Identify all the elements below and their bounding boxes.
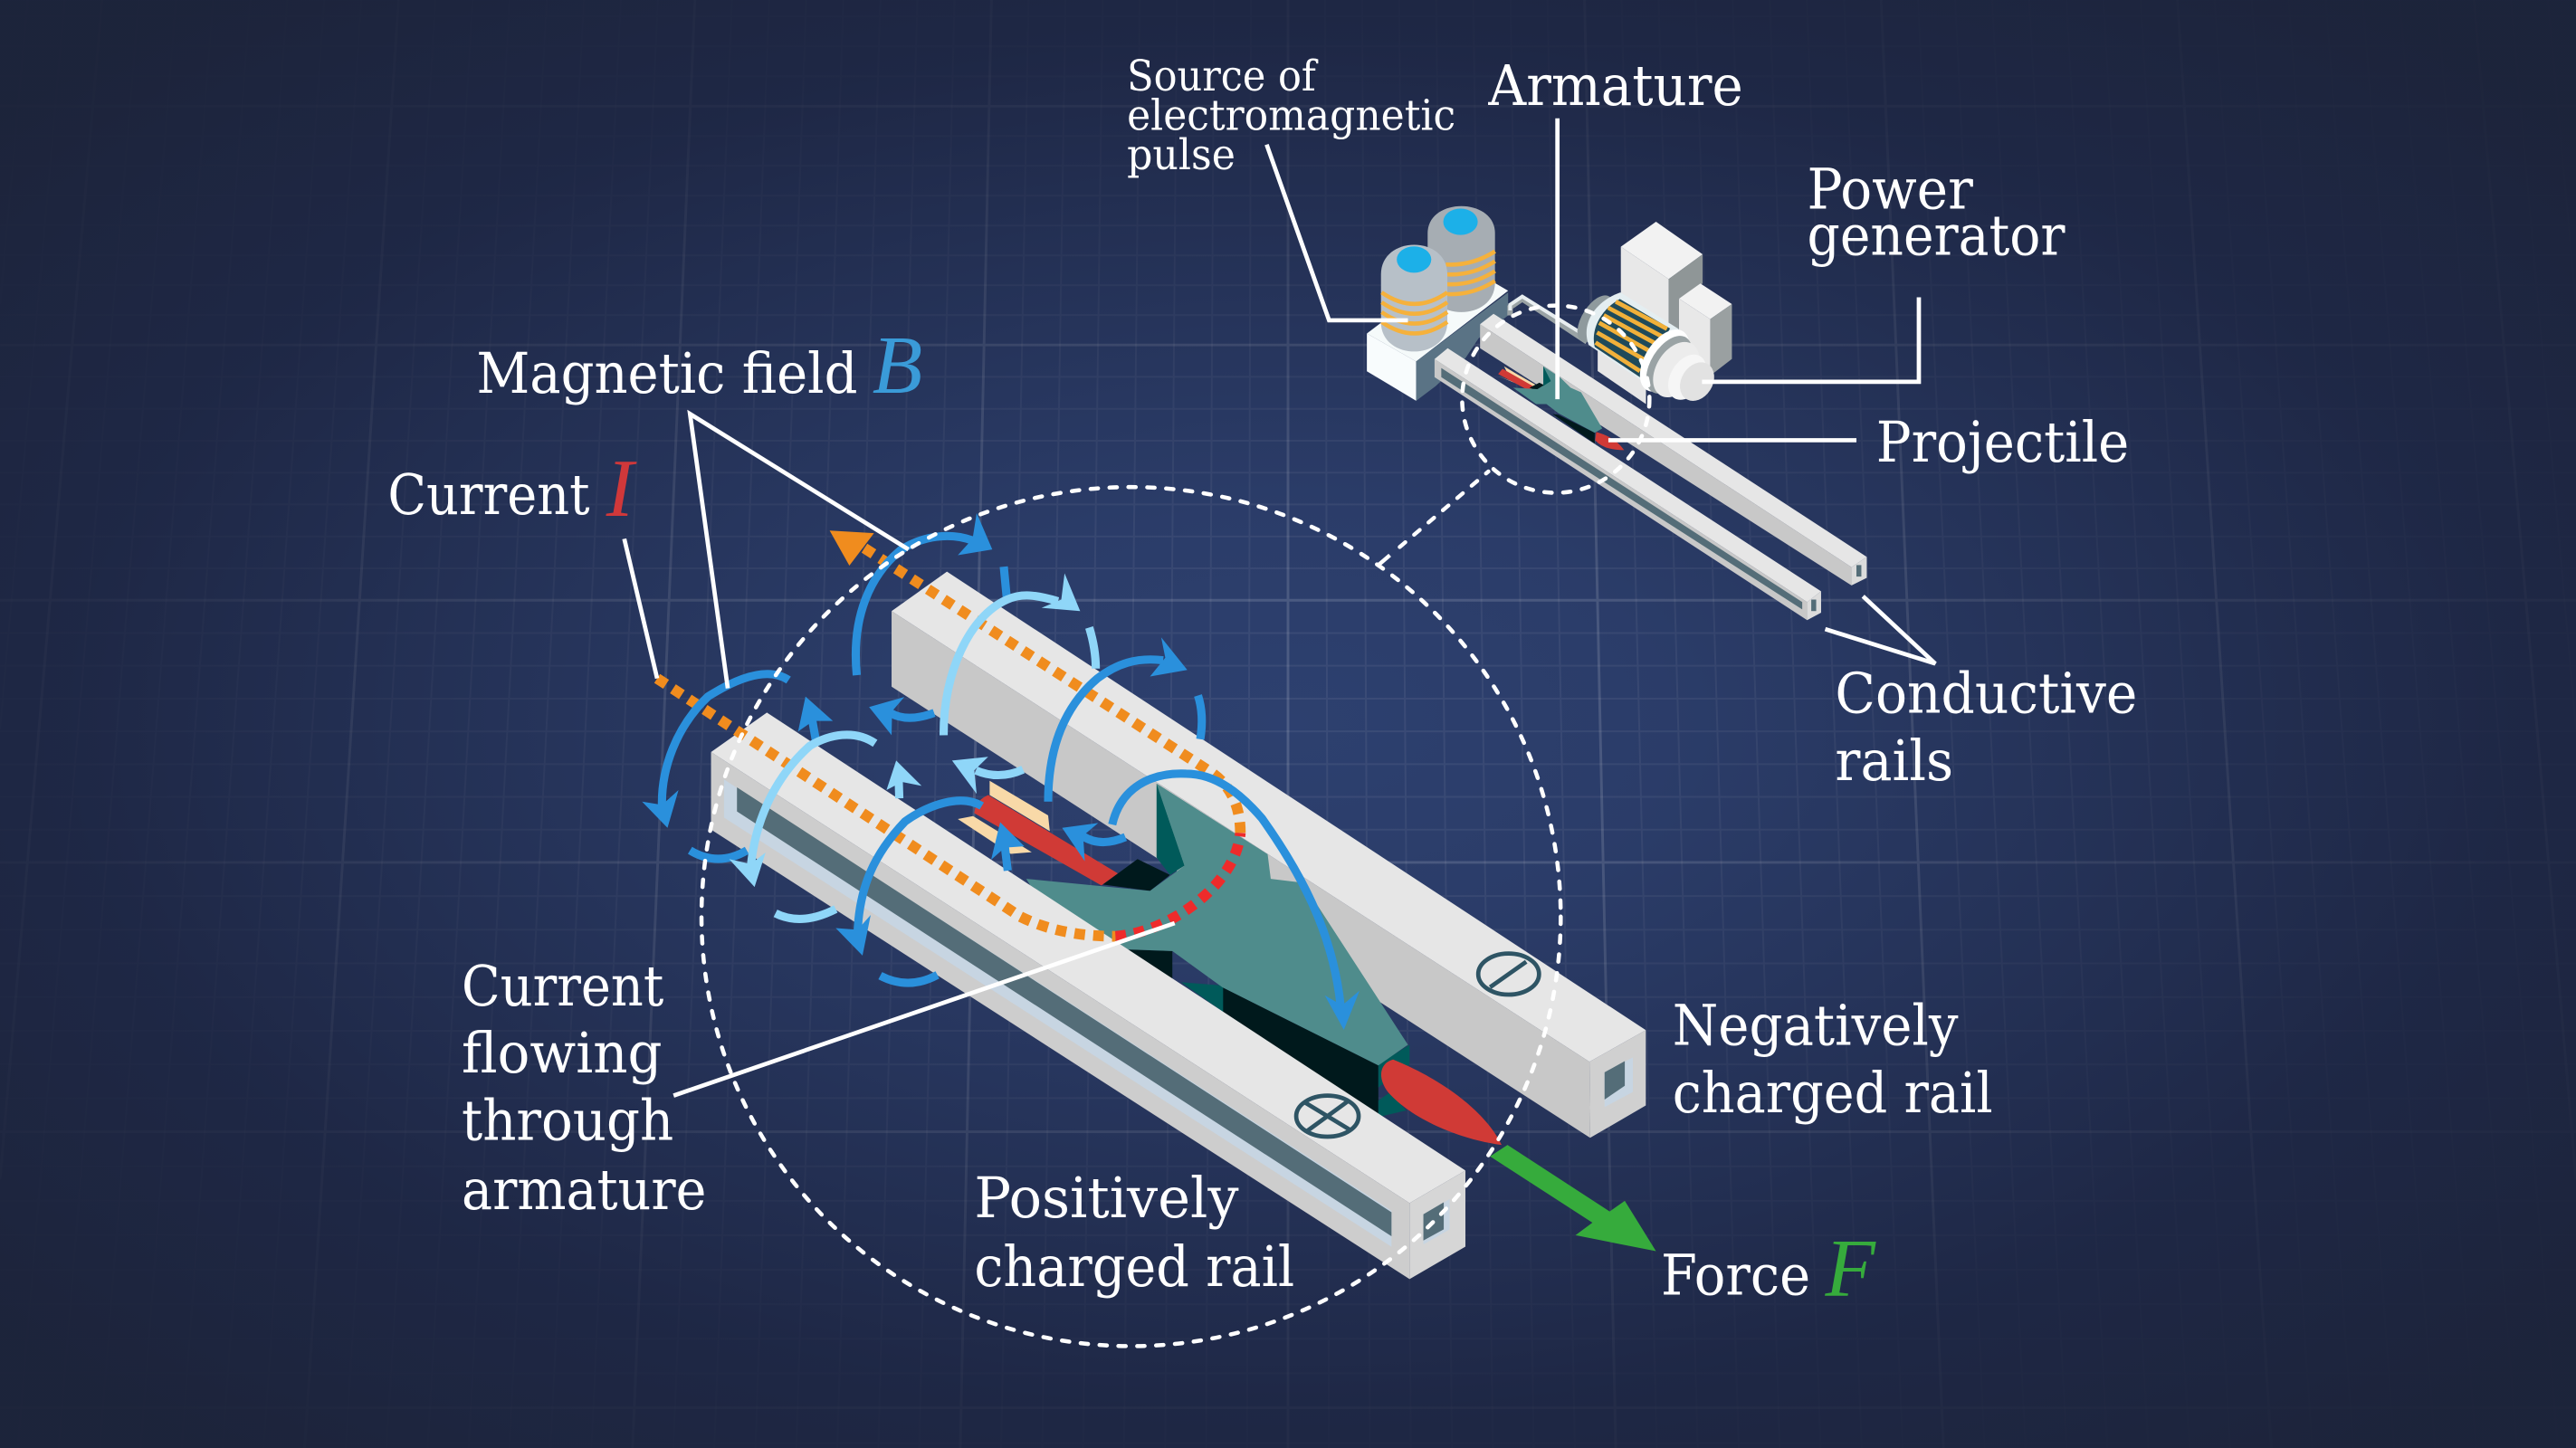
rear rail end window [1605, 1057, 1633, 1107]
front coil cylinder [1381, 244, 1447, 351]
side groove [724, 779, 1391, 1247]
leader lines [625, 119, 1935, 1096]
label: force F [1661, 1223, 1877, 1314]
force arrow [1490, 1145, 1656, 1252]
label: negatively charged rail: charged rail [1673, 1061, 1993, 1126]
main projectile [958, 781, 1502, 1145]
label: conductive rails [1835, 662, 2137, 794]
wire frame [1510, 297, 1587, 342]
overview front rail [1435, 348, 1821, 620]
symbol: current in [1296, 1096, 1359, 1137]
armature dark fin [1157, 784, 1185, 875]
label: force F: Force [1661, 1243, 1810, 1308]
magnetic field arcs: front rail [642, 674, 1025, 983]
projectile shaft [974, 795, 1118, 885]
projectile nose [1381, 1060, 1502, 1145]
label: negatively charged rail: Negatively [1673, 993, 1959, 1058]
label: source of electromagnetic pulse: electromagnetic [1127, 90, 1455, 140]
label: magnetic field B: B [873, 319, 922, 411]
symbol: current out [1478, 954, 1539, 995]
label: power generator [1808, 157, 2066, 268]
overview rear rail [1480, 314, 1866, 586]
label: current flowing through armature: armature [462, 1157, 706, 1223]
label: source of electromagnetic pulse [1127, 52, 1455, 180]
motor stator [1587, 292, 1681, 383]
armature body [1026, 784, 1407, 1065]
main front rail: positively charged [711, 712, 1465, 1279]
label: positively charged rail: charged rail [974, 1234, 1294, 1300]
motor end shell left [1570, 290, 1620, 348]
overview dashed circle [1462, 306, 1649, 493]
label: positively charged rail [974, 1166, 1294, 1300]
label: conductive rails: Conductive [1835, 662, 2137, 727]
magnetic field arcs: rear rail [855, 513, 1360, 1030]
label: current I: Current [387, 462, 590, 528]
label: power generator: generator [1808, 203, 2066, 268]
label: magnetic field B [476, 319, 922, 411]
main rear rail: negatively charged [892, 572, 1646, 1138]
label: armature: Armature [1487, 53, 1743, 119]
projectile tail fins [958, 781, 1050, 853]
overview railgun illustration [1367, 206, 1866, 620]
armature shadow blocks [1102, 859, 1409, 1117]
rear coil cylinder [1427, 206, 1495, 312]
motor end discs [1630, 321, 1722, 407]
end window [1424, 1199, 1450, 1244]
label: current flowing through armature: flowing [462, 1021, 662, 1086]
magnified view dashed circle [701, 487, 1560, 1346]
label: power generator: Power [1808, 157, 1973, 223]
label: source of electromagnetic pulse: Source of [1127, 52, 1319, 101]
label: current I: I [606, 443, 637, 534]
current path [657, 530, 1240, 937]
label: force F: F [1825, 1223, 1877, 1314]
label: magnetic field B: Magnetic field [476, 341, 857, 406]
overview projectile [1498, 367, 1624, 450]
power generator [1570, 222, 1732, 407]
label: conductive rails: rails [1835, 729, 1953, 794]
zoom connector [1378, 472, 1488, 566]
label: current flowing through armature: through [462, 1089, 673, 1154]
label: source of electromagnetic pulse: pulse [1127, 130, 1236, 180]
label: current flowing through armature: Current [462, 954, 663, 1019]
label: negatively charged rail [1673, 993, 1993, 1126]
label: positively charged rail: Positively [974, 1166, 1239, 1231]
generator blocks [1598, 222, 1732, 405]
label: projectile: Projectile [1876, 410, 2129, 475]
label: current flowing through armature [462, 954, 706, 1223]
label: current I [387, 443, 637, 534]
source of electromagnetic pulse: base block [1367, 262, 1508, 401]
